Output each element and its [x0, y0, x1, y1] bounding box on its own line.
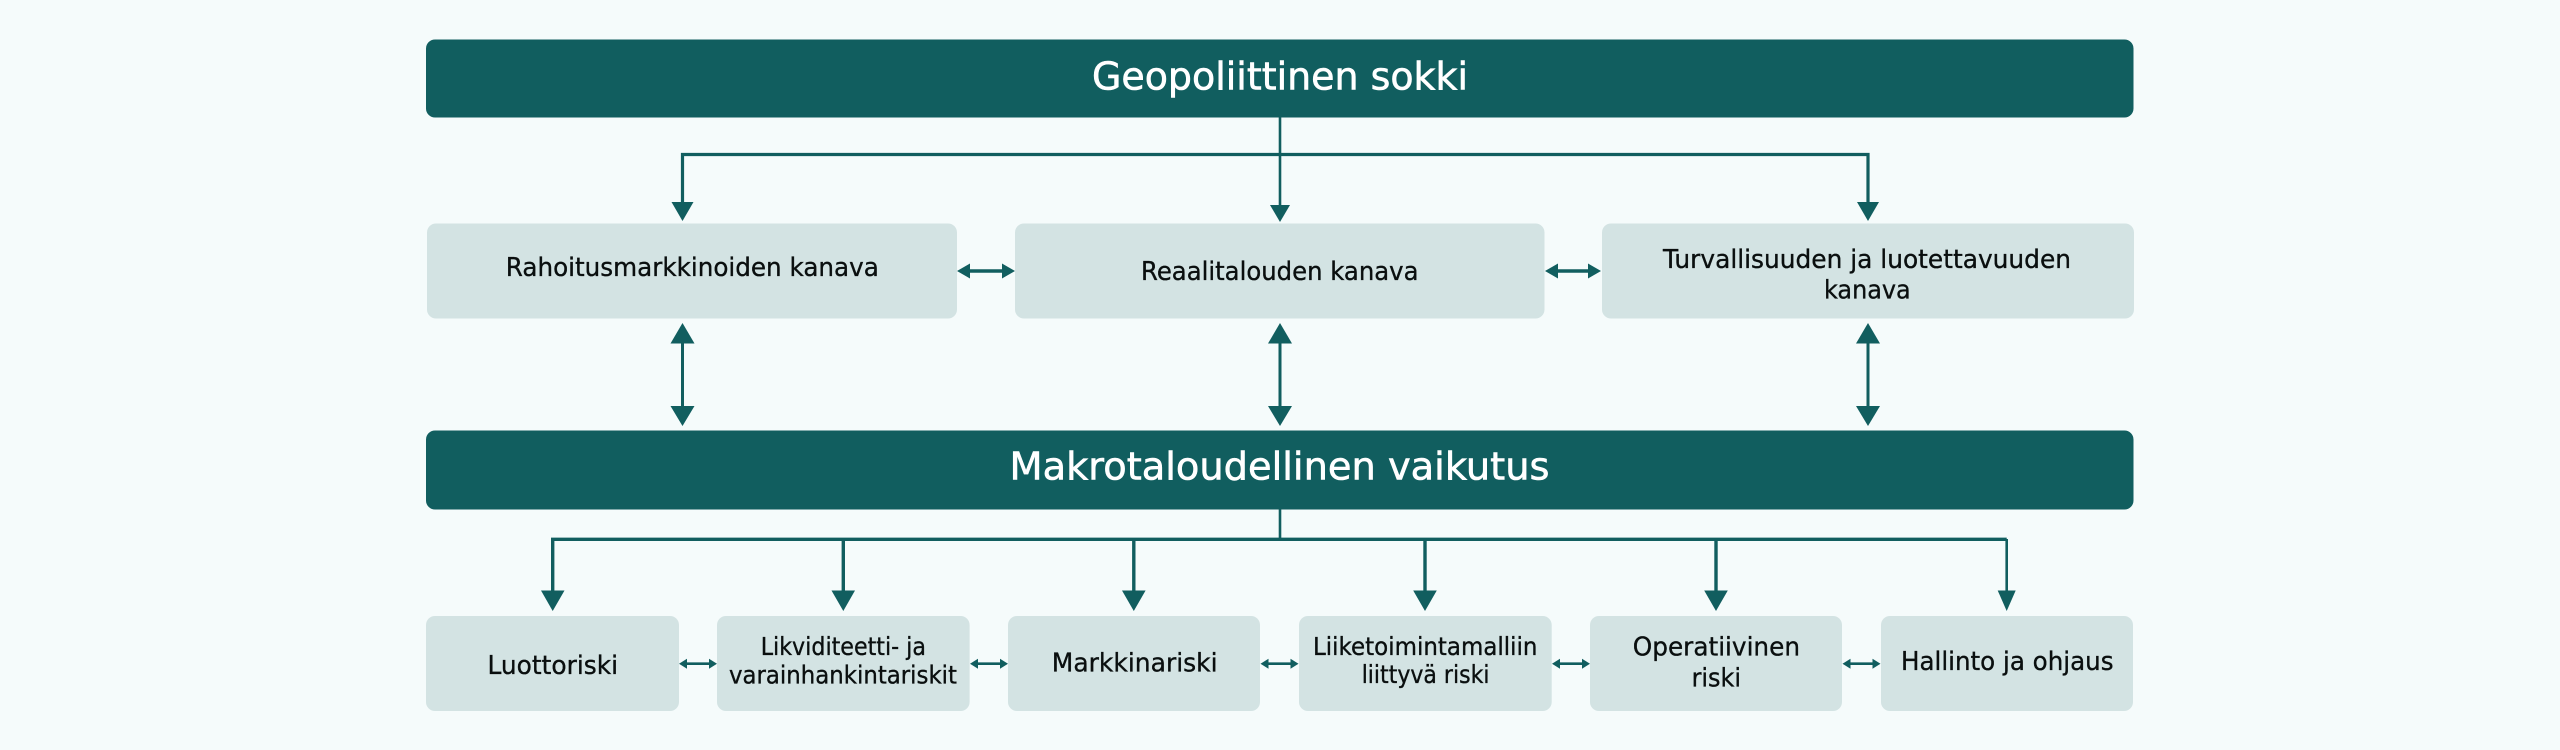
- panel: security and confidence channel: [1602, 224, 2134, 318]
- panel: liquidity and funding risks: [717, 616, 970, 711]
- panel: liquidity and funding risks: varainhankintariskit: [729, 660, 957, 689]
- panel: governance: [1881, 616, 2133, 711]
- panel: market risk: Markkinariski: [1052, 649, 1218, 679]
- panel: financial markets channel: [427, 224, 957, 318]
- panel: credit risk: Luottoriski: [488, 651, 618, 681]
- arrows: impact to six risk types: [541, 509, 2016, 611]
- panel: liquidity and funding risks: Likviditeetti- ja: [761, 632, 926, 661]
- panel: security and confidence channel: kanava: [1824, 275, 1911, 305]
- panel: real economy channel: Reaalitalouden kanava: [1141, 257, 1418, 287]
- panel: business model risk: liittyvä riski: [1362, 660, 1490, 689]
- heading bar: Geopoliittinen sokki: [426, 40, 2134, 118]
- panel: operational risk: riski: [1692, 664, 1741, 694]
- panel: operational risk: [1590, 616, 1842, 711]
- panel: governance: Hallinto ja ohjaus: [1901, 647, 2114, 677]
- panel: operational risk: Operatiivinen: [1633, 633, 1800, 663]
- heading bar: Makrotaloudellinen vaikutus: [426, 430, 2134, 510]
- heading bar: Makrotaloudellinen vaikutus: Makrotaloudellinen vaikutus: [1010, 444, 1550, 488]
- arrows: channels to macroeconomic impact: [670, 323, 1880, 426]
- panel: security and confidence channel: Turvallisuuden ja luotettavuuden: [1662, 245, 2071, 275]
- panel: real economy channel: [1015, 224, 1544, 318]
- arrows: between channels: [957, 264, 1601, 278]
- heading bar: Geopoliittinen sokki: Geopoliittinen sokki: [1092, 54, 1468, 98]
- panel: credit risk: [426, 616, 679, 711]
- arrows: shock to three channels: [672, 117, 1879, 222]
- panel: market risk: [1008, 616, 1260, 711]
- arrows: between risk types: [679, 659, 1880, 669]
- panel: business model risk: [1299, 616, 1552, 711]
- panel: business model risk: Liiketoimintamalliin: [1313, 632, 1538, 661]
- panel: financial markets channel: Rahoitusmarkkinoiden kanava: [506, 253, 879, 283]
